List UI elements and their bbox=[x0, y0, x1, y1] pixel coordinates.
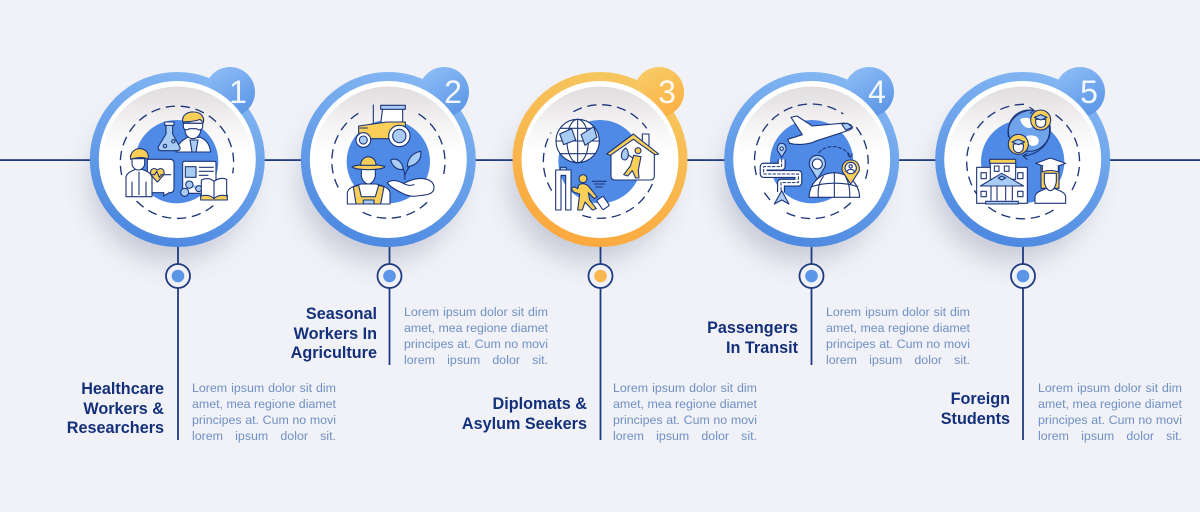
connector node 2 bbox=[378, 264, 402, 288]
step 4 circle: Passengers In Transit: 4 bbox=[868, 74, 886, 110]
step 2 circle: Seasonal Workers In Agriculture: 2 bbox=[444, 74, 462, 110]
step 1 circle: Healthcare Workers & Researchers bbox=[90, 67, 265, 440]
text block 3: lorem ipsum dolor sit. bbox=[613, 429, 757, 443]
connector node 5 bbox=[1011, 264, 1035, 288]
icon: globe, students and university bbox=[967, 104, 1080, 219]
text block 5: lorem ipsum dolor sit. bbox=[1038, 429, 1182, 443]
text block 1: amet, mea regione diamet bbox=[192, 397, 336, 411]
text block 4: principes at. Cum no movi bbox=[826, 337, 970, 351]
connector node 4 bbox=[800, 264, 824, 288]
step 5 circle: Foreign Students: 5 bbox=[1080, 74, 1098, 110]
heading: Healthcare Workers & Researchers bbox=[67, 380, 164, 437]
step 3 circle: Diplomats & Asylum Seekers (highlighted) bbox=[510, 67, 688, 440]
text block 4: Lorem ipsum dolor sit dim bbox=[826, 305, 970, 319]
heading: Diplomats & Asylum Seekers bbox=[462, 395, 587, 433]
heading: Seasonal Workers In Agriculture: Agriculture bbox=[291, 344, 377, 362]
step 3 circle: Diplomats & Asylum Seekers (highlighted): 3 bbox=[658, 74, 676, 110]
heading: Passengers In Transit: In Transit bbox=[726, 339, 798, 357]
text block 3 bbox=[613, 381, 757, 443]
text block 3: Lorem ipsum dolor sit dim bbox=[613, 381, 757, 395]
text block 1: principes at. Cum no movi bbox=[192, 413, 336, 427]
text block 2: amet, mea regione diamet bbox=[404, 321, 548, 335]
step 5 circle: Foreign Students bbox=[933, 67, 1110, 440]
step 1 circle: Healthcare Workers & Researchers: 1 bbox=[229, 74, 247, 110]
text block 1: Lorem ipsum dolor sit dim bbox=[192, 381, 336, 395]
text block 2: principes at. Cum no movi bbox=[404, 337, 548, 351]
heading: Diplomats & Asylum Seekers: Asylum Seekers bbox=[462, 415, 587, 433]
heading: Seasonal Workers In Agriculture bbox=[291, 305, 377, 362]
text block 1: lorem ipsum dolor sit. bbox=[192, 429, 336, 443]
heading: Passengers In Transit bbox=[707, 319, 798, 357]
text block 2: Lorem ipsum dolor sit dim bbox=[404, 305, 548, 319]
text block 2: lorem ipsum dolor sit. bbox=[404, 353, 548, 367]
text block 3: principes at. Cum no movi bbox=[613, 413, 757, 427]
text block 4: amet, mea regione diamet bbox=[826, 321, 970, 335]
text block 5: principes at. Cum no movi bbox=[1038, 413, 1182, 427]
connector node 1 bbox=[166, 264, 190, 288]
icon: plane, route, globe and pins bbox=[754, 104, 868, 219]
timeline axis bbox=[0, 159, 1200, 161]
heading: Healthcare Workers & Researchers: Healthcare bbox=[81, 380, 164, 398]
text block 1 bbox=[192, 381, 336, 443]
heading: Seasonal Workers In Agriculture: Seasonal bbox=[306, 305, 377, 323]
heading: Diplomats & Asylum Seekers: Diplomats & bbox=[493, 395, 587, 413]
heading: Seasonal Workers In Agriculture: Workers In bbox=[294, 325, 377, 343]
heading: Healthcare Workers & Researchers: Researchers bbox=[67, 419, 164, 437]
heading: Foreign Students: Students bbox=[941, 410, 1010, 428]
text block 5: amet, mea regione diamet bbox=[1038, 397, 1182, 411]
text block 3: amet, mea regione diamet bbox=[613, 397, 757, 411]
step 4 circle: Passengers In Transit bbox=[722, 67, 899, 365]
heading: Healthcare Workers & Researchers: Workers & bbox=[83, 400, 164, 418]
text block 5: Lorem ipsum dolor sit dim bbox=[1038, 381, 1182, 395]
text block 4: lorem ipsum dolor sit. bbox=[826, 353, 970, 367]
icon: tractor, farmer and plant bbox=[332, 105, 445, 218]
icon: globe, security gate, traveller and house bbox=[543, 105, 659, 218]
text block 2 bbox=[404, 305, 548, 367]
connector node 3 bbox=[588, 264, 612, 288]
step 2 circle: Seasonal Workers In Agriculture bbox=[300, 67, 476, 365]
text block 5 bbox=[1038, 381, 1182, 443]
heading: Passengers In Transit: Passengers bbox=[707, 319, 798, 337]
heading: Foreign Students: Foreign bbox=[951, 390, 1010, 408]
heading: Foreign Students bbox=[941, 390, 1010, 428]
icon: doctors, flask, browser and book bbox=[120, 106, 234, 218]
text block 4 bbox=[826, 305, 970, 367]
